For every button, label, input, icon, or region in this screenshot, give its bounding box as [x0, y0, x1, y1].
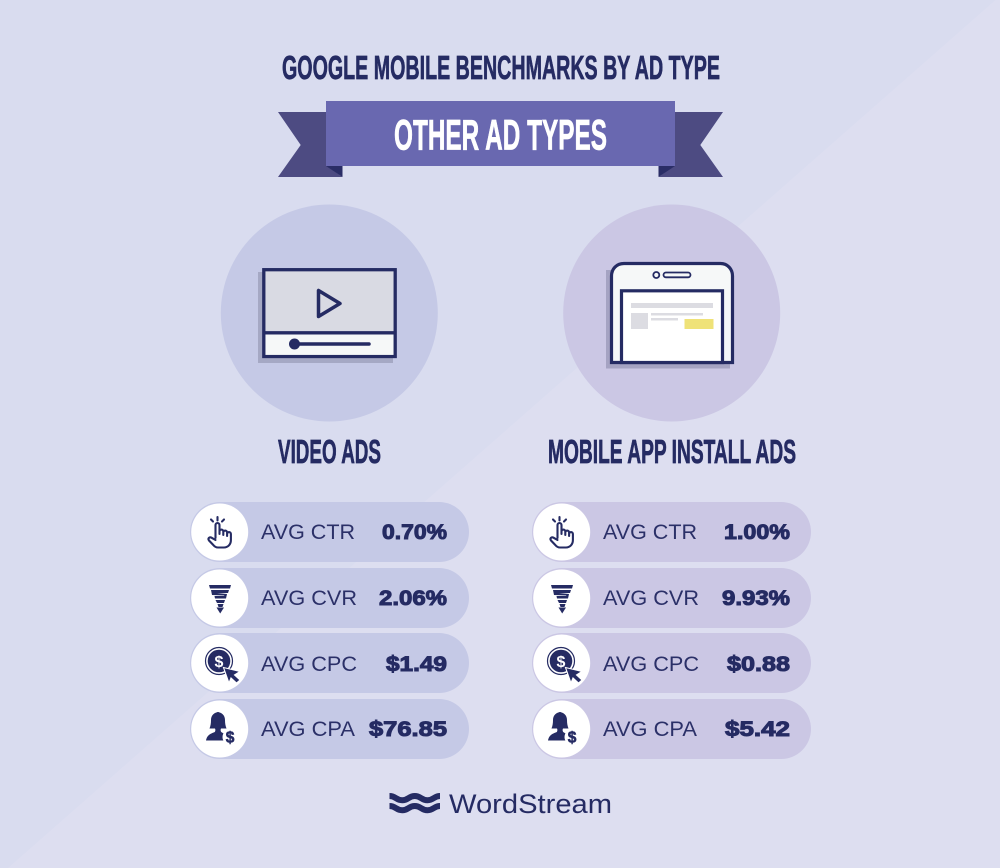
metric: cpc: [532, 633, 811, 693]
value: $76.85: [369, 718, 447, 741]
metric: cpa: [190, 699, 469, 759]
label: AVG CPA: [261, 717, 356, 741]
mobile circle: [563, 204, 780, 422]
label: AVG CPA: [603, 717, 698, 741]
value: 0.70%: [382, 521, 447, 544]
value: $0.88: [727, 653, 790, 676]
label: AVG CVR: [603, 586, 699, 610]
icon: person with dollar: [548, 712, 580, 746]
heading: video ads: VIDEO ADS: [278, 433, 381, 470]
value: 1.00%: [724, 521, 790, 544]
value: 9.93%: [722, 587, 790, 610]
icon: person with dollar: $: [226, 730, 235, 746]
icon: person with dollar: [206, 712, 238, 746]
value: $1.49: [386, 653, 447, 676]
icon: coin and cursor: [548, 648, 582, 683]
icon: coin and cursor: $: [215, 654, 224, 671]
metric: cpc: [190, 633, 469, 693]
label: AVG CPC: [261, 652, 357, 676]
icon: phone with ad: [606, 264, 732, 368]
metric: cvr: [532, 568, 811, 628]
metric: ctr: [190, 502, 469, 562]
heading: mobile app install ads: MOBILE APP INSTALL ADS: [548, 433, 796, 470]
value: 2.06%: [379, 587, 447, 610]
ribbon banner: [278, 101, 723, 177]
panel: video ads: [190, 204, 469, 759]
label: AVG CVR: [261, 586, 357, 610]
icon: tapping hand: [208, 517, 231, 548]
metric: cvr: [190, 568, 469, 628]
label: AVG CPC: [603, 652, 699, 676]
WordStream logo: [390, 789, 612, 819]
metric: ctr: [532, 502, 811, 562]
icon: coin and cursor: [206, 648, 240, 683]
icon: waves: [390, 796, 440, 810]
icon: person with dollar: $: [568, 730, 577, 746]
icon: funnel: [551, 585, 573, 614]
icon: coin and cursor: $: [557, 654, 566, 671]
video circle: [221, 204, 438, 422]
label: AVG CTR: [261, 520, 355, 544]
icon: tapping hand: [550, 517, 573, 548]
icon: video player: [258, 270, 395, 363]
panel: mobile app install ads: [532, 204, 811, 759]
label: AVG CTR: [603, 520, 697, 544]
icon: funnel: [209, 585, 231, 614]
metric: cpa: [532, 699, 811, 759]
logo wordmark: WordStream: [449, 789, 612, 819]
value: $5.42: [725, 718, 790, 741]
banner text: OTHER AD TYPES: [394, 112, 607, 160]
